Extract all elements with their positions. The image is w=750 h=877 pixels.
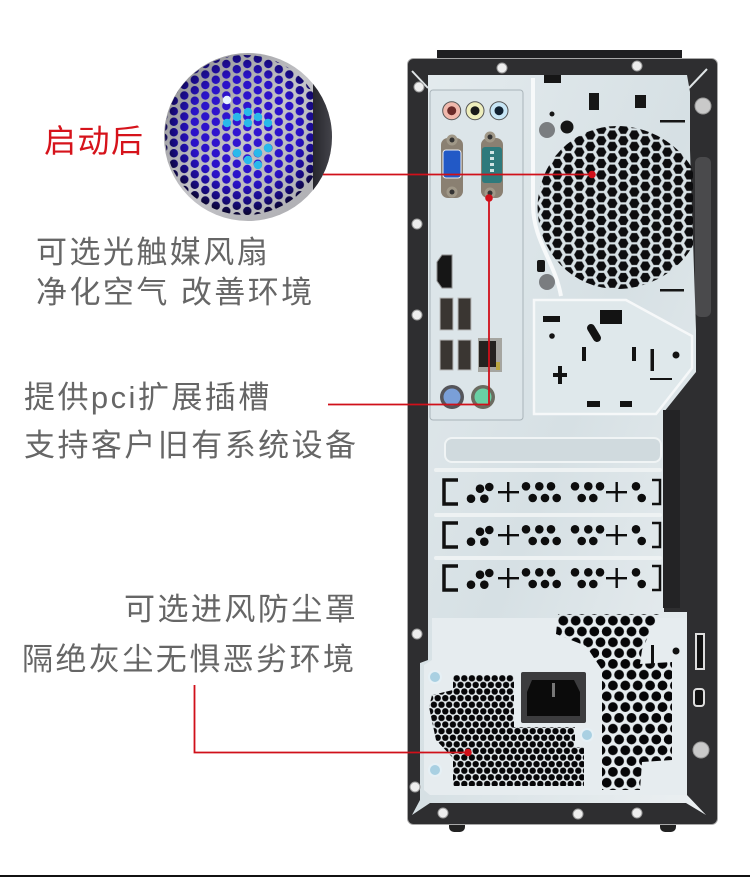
text: optional photocatalyst fan line one: 可选光触媒风扇 [36,235,270,270]
PS/2 mouse and keyboard ports [440,385,495,409]
power supply vent [429,675,584,786]
vent slot and dot [651,645,680,667]
frame rivets [410,61,711,819]
cyan highlights [223,108,272,169]
chassis upper cutouts [537,75,685,292]
LAN port [478,338,502,372]
VGA port [441,134,463,198]
text: dust cover line one: 可选进风防尘罩 [124,592,358,627]
expansion slots [434,468,662,590]
power socket [521,672,586,723]
text: optional photocatalyst fan line two: 净化空气 改善环境 [36,275,315,310]
case outer frame [408,58,718,824]
right handle strip [695,157,711,317]
inner black bar [663,410,680,608]
text: dust cover line two: 隔绝灰尘无惧恶劣环境 [22,642,356,677]
fan holes glowing blue [165,55,325,215]
fan vent honeycomb [538,126,693,289]
computer case rear view [408,50,718,832]
top black band [424,60,682,75]
USB ports [440,298,471,370]
expansion plate [534,300,692,414]
corner highlights [412,69,707,88]
case feet [449,820,676,832]
label: after power-on: 启动后 [44,123,145,159]
text: pci extension line one: 提供pci扩展插槽 [24,380,272,415]
power supply bright plate [424,618,687,795]
lower vent honeycomb [556,614,672,790]
side lock slots [694,634,704,706]
HDMI port [437,255,452,288]
dark side crescent [313,84,332,190]
case top lip [437,50,682,64]
rear I/O plate [430,90,523,420]
callout line: pci [328,194,493,404]
metal chassis [412,75,706,815]
shroud highlight curve [533,78,561,296]
mounting screws [429,671,593,776]
blank slot cover [445,438,661,462]
audio jacks [443,102,508,120]
serial port [481,132,503,198]
white glint [223,96,231,104]
bottom rule [0,875,750,877]
callout line: fan [323,171,596,178]
text: pci extension line two: 支持客户旧有系统设备 [24,428,358,463]
callout line: dust filter [194,685,472,756]
magnified glowing fan [164,50,343,225]
